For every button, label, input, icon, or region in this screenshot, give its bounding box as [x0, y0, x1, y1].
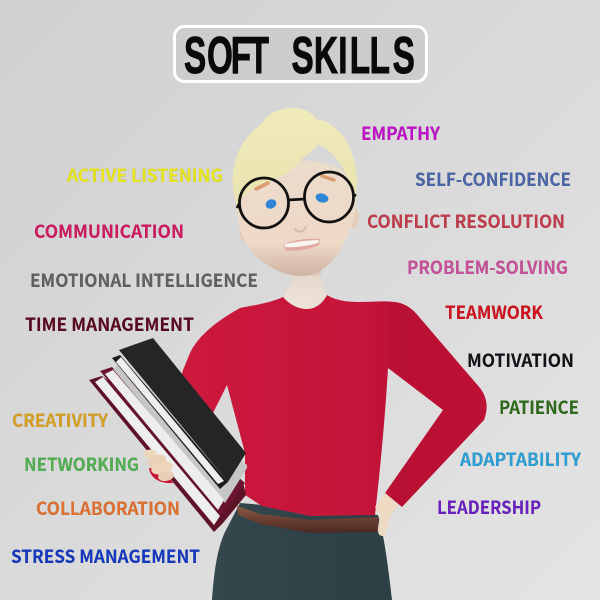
eyebrows — [256, 183, 268, 189]
label: motivation: MOTIVATION — [467, 347, 574, 373]
book: black back cover — [112, 355, 228, 489]
label: empathy: EMPATHY — [361, 120, 441, 146]
label: emotional intelligence: EMOTIONAL INTELLIGENCE — [30, 267, 258, 293]
right hand on hip — [375, 493, 399, 536]
label: self-confidence: SELF-CONFIDENCE — [415, 166, 571, 192]
book: grey cover — [113, 364, 247, 503]
skill labels — [11, 120, 582, 569]
mouth — [283, 239, 320, 251]
label: leadership: LEADERSHIP — [437, 494, 541, 520]
head — [233, 108, 359, 276]
belt — [237, 506, 378, 533]
label: communication: COMMUNICATION — [34, 218, 184, 244]
hair — [233, 108, 357, 205]
label: patience: PATIENCE — [499, 394, 579, 420]
label: teamwork: TEAMWORK — [445, 299, 544, 325]
book: black front cover — [119, 338, 246, 482]
book: middle pages — [105, 370, 224, 510]
label: stress management: STRESS MANAGEMENT — [11, 543, 200, 569]
label: collaboration: COLLABORATION — [36, 495, 180, 521]
left hand holding books — [144, 450, 175, 483]
label: active listening: ACTIVE LISTENING — [66, 162, 223, 188]
nose — [295, 227, 306, 231]
books — [89, 338, 247, 532]
character: teacher figure — [89, 108, 487, 600]
book: maroon pages — [95, 377, 220, 525]
book: top pages — [116, 357, 224, 484]
label: adaptability: ADAPTABILITY — [459, 446, 582, 472]
glasses — [237, 172, 356, 228]
book: middle maroon cover — [100, 367, 245, 516]
book: maroon back cover — [89, 376, 246, 532]
label: creativity: CREATIVITY — [12, 407, 109, 433]
eyes — [264, 198, 278, 210]
face — [236, 161, 356, 276]
skirt — [212, 503, 392, 600]
neck — [283, 262, 327, 312]
label: problem-solving: PROBLEM-SOLVING — [407, 254, 568, 280]
label: networking: NETWORKING — [24, 451, 139, 477]
label: conflict resolution: CONFLICT RESOLUTION — [367, 208, 565, 234]
title: SOFT SKILLS — [184, 27, 415, 85]
red sweater — [180, 295, 487, 516]
ears — [239, 224, 251, 242]
label: time management: TIME MANAGEMENT — [25, 311, 194, 337]
